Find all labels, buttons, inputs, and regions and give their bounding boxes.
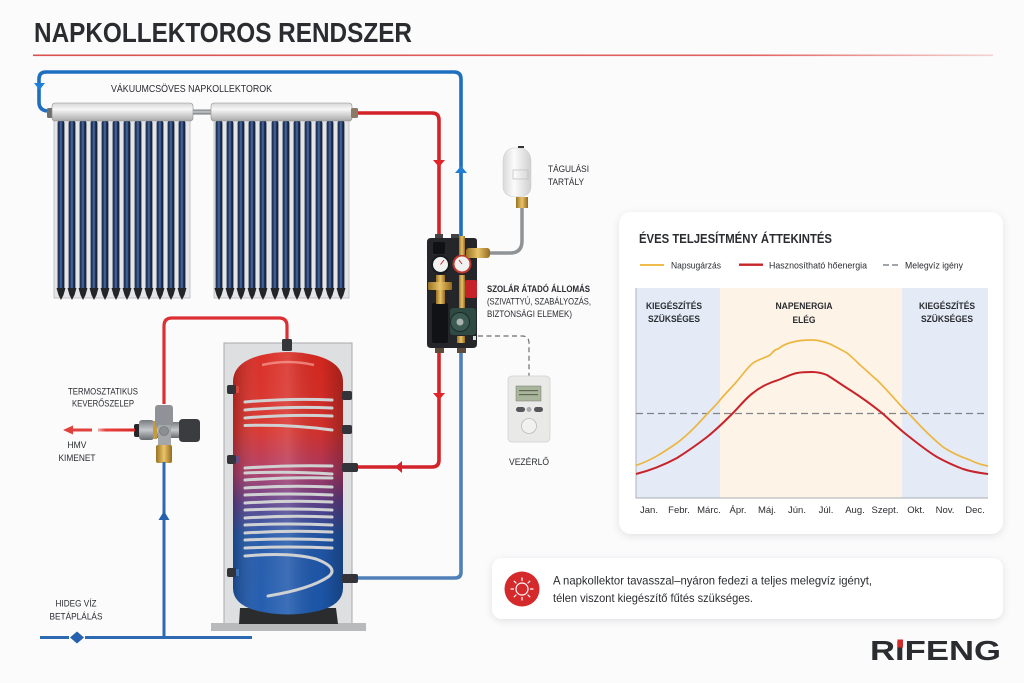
expansion tank bbox=[490, 146, 531, 253]
collector 2 bbox=[211, 103, 358, 300]
month axis labels: Dec. bbox=[965, 505, 985, 516]
plot zones bbox=[636, 288, 988, 498]
month axis labels: Márc. bbox=[697, 505, 721, 516]
month axis labels: Febr. bbox=[668, 505, 690, 516]
month axis labels bbox=[640, 505, 985, 516]
lower coil bbox=[245, 466, 332, 596]
upper coil bbox=[245, 399, 332, 430]
vacuum tube collectors label: VÁKUUMCSÖVES NAPKOLLEKTOROK bbox=[111, 82, 272, 95]
arrow: red into tank bbox=[395, 461, 402, 473]
controller label: VEZÉRLŐ bbox=[509, 457, 549, 467]
pump bbox=[450, 308, 476, 335]
legend bbox=[640, 260, 963, 272]
text: TARTÁLY bbox=[548, 177, 584, 187]
solar loop return pipe: blue bbox=[34, 72, 467, 578]
arrow: red down below station bbox=[433, 393, 445, 400]
gauge right bbox=[452, 254, 472, 274]
cold water label: HIDEG VÍZ bbox=[56, 598, 97, 610]
zone labels: SZÜKSÉGES bbox=[648, 314, 700, 324]
mixing valve bbox=[134, 405, 200, 463]
arrow: blue up on return bbox=[455, 166, 467, 173]
solar loop supply pipe: red bbox=[356, 113, 445, 473]
tank ports left bbox=[227, 385, 239, 577]
note text: A napkollektor tavasszal–nyáron fedezi a teljes melegvíz igényt, bbox=[553, 574, 872, 588]
text: KIMENET bbox=[58, 453, 96, 464]
month axis labels: Szept. bbox=[872, 505, 898, 516]
title: NAPKOLLEKTOROS RENDSZER bbox=[34, 17, 412, 48]
mixing valve label: TERMOSZTATIKUS bbox=[68, 386, 138, 396]
hot water pipe from tank to mixing valve bbox=[164, 318, 287, 404]
collector 1 bbox=[47, 103, 193, 300]
zone labels: KIEGÉSZÍTÉS bbox=[646, 301, 702, 311]
zone labels bbox=[646, 301, 975, 325]
month axis labels: Máj. bbox=[758, 505, 776, 516]
text: BETÁPLÁLÁS bbox=[50, 612, 102, 622]
zone labels: ELÉG bbox=[792, 315, 816, 325]
chart heading: ÉVES TELJESÍTMÉNY ÁTTEKINTÉS bbox=[639, 231, 832, 246]
demand dashed line bbox=[636, 412, 988, 414]
text: (SZIVATTYÚ, SZABÁLYOZÁS, bbox=[487, 296, 591, 306]
gauge left bbox=[431, 255, 450, 274]
text: BIZTONSÁGI ELEMEK) bbox=[487, 309, 572, 319]
brass valves bbox=[436, 275, 445, 304]
month axis labels: Okt. bbox=[907, 505, 925, 516]
text: KEVERŐSZELEP bbox=[72, 398, 134, 408]
legend: Napsugárzás bbox=[671, 260, 721, 272]
arrow: red down above station bbox=[433, 160, 445, 167]
station label: SZOLÁR ÁTADÓ ÁLLOMÁS bbox=[487, 283, 590, 295]
cold water feed pipe bbox=[40, 462, 252, 644]
month axis labels: Jan. bbox=[640, 505, 658, 516]
expansion tank label: TÁGULÁSI bbox=[548, 164, 589, 174]
legend: Hasznosítható hőenergia bbox=[769, 260, 868, 272]
callout: summary note bbox=[492, 558, 1003, 619]
legend: Melegvíz igény bbox=[905, 260, 963, 272]
month axis labels: Ápr. bbox=[730, 505, 746, 516]
red handle bbox=[465, 280, 477, 298]
storage tank bbox=[211, 339, 366, 631]
controller bbox=[508, 376, 550, 442]
usable heat curve bbox=[636, 372, 988, 474]
logo: RIFENG: RIFENG bbox=[870, 635, 1001, 666]
collector connector bbox=[193, 110, 211, 114]
icon: sun bbox=[504, 572, 540, 606]
tank ports right bbox=[342, 391, 358, 583]
month axis labels: Aug. bbox=[845, 505, 865, 516]
zone labels: KIEGÉSZÍTÉS bbox=[919, 301, 975, 311]
month axis labels: Nov. bbox=[936, 505, 954, 516]
solar transfer station bbox=[427, 234, 490, 353]
solar irradiation curve bbox=[636, 340, 988, 466]
month axis labels: Júl. bbox=[819, 505, 833, 516]
zone labels: SZÜKSÉGES bbox=[921, 314, 973, 324]
controller signal line bbox=[478, 336, 529, 376]
arrow: blue down on collector inlet bbox=[34, 83, 45, 90]
hot water output arrow bbox=[63, 426, 135, 434]
zone labels: NAPENERGIA bbox=[776, 301, 833, 311]
hot water output label: HMV bbox=[68, 440, 87, 451]
month axis labels: Jún. bbox=[788, 505, 806, 516]
panel: annual performance chart bbox=[619, 212, 1003, 534]
callout: summary note: télen viszont kiegészítő fűtés szükséges. bbox=[553, 591, 753, 605]
